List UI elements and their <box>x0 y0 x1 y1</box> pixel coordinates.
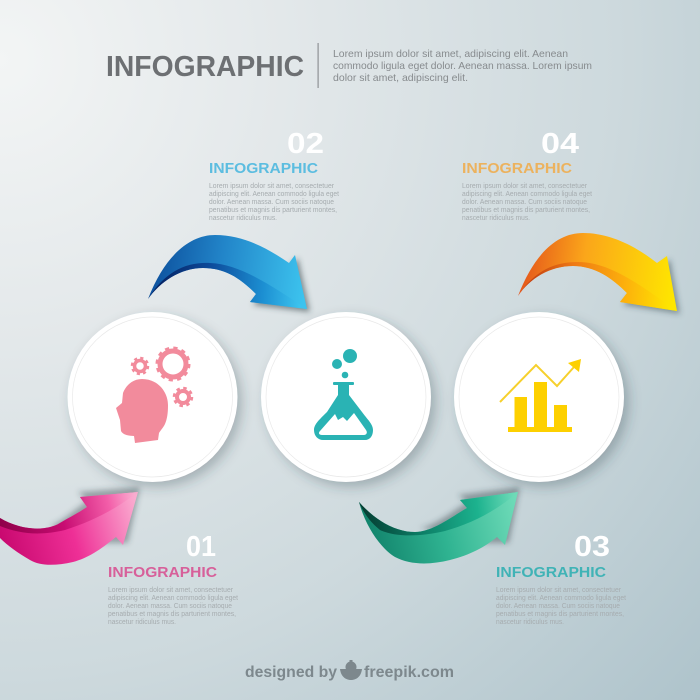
body 04 <box>462 183 592 222</box>
title: INFOGRAPHIC <box>106 51 304 83</box>
arrow: blue <box>148 235 310 312</box>
footer credit: freepik.com <box>364 664 454 681</box>
body 01: adipiscing elit. Aenean commodo ligula eget <box>108 595 238 602</box>
body 04: adipiscing elit. Aenean commodo ligula eget <box>462 191 592 198</box>
body 01: dolor. Aenean massa. Cum sociis natoque <box>108 603 232 610</box>
body 02: dolor. Aenean massa. Cum sociis natoque <box>209 199 334 206</box>
body 03: nascetur ridiculus mus. <box>496 619 564 626</box>
body 03: adipiscing elit. Aenean commodo ligula eget <box>496 595 626 602</box>
body 02: nascetur ridiculus mus. <box>209 215 277 222</box>
body 01: Lorem ipsum dolor sit amet, consectetuer <box>108 587 234 594</box>
icon: bar chart with rising arrow <box>500 359 581 432</box>
circle panel 2 <box>261 312 436 487</box>
body 01: nascetur ridiculus mus. <box>108 619 176 626</box>
step 01 text <box>108 531 238 626</box>
heading 04: INFOGRAPHIC <box>462 161 573 177</box>
body 04: nascetur ridiculus mus. <box>462 215 530 222</box>
step 04 text <box>462 128 592 222</box>
heading 01: INFOGRAPHIC <box>108 565 218 581</box>
body 04: penatibus et magnis dis parturient montes, <box>462 207 590 214</box>
step 02 text <box>209 128 339 222</box>
body 03: dolor. Aenean massa. Cum sociis natoque <box>496 603 620 610</box>
footer credit <box>245 660 454 681</box>
circle panel 1 <box>68 312 242 487</box>
body 01 <box>108 587 238 626</box>
body 03: penatibus et magnis dis parturient montes, <box>496 611 624 618</box>
body 04: dolor. Aenean massa. Cum sociis natoque <box>462 199 587 206</box>
body 02: adipiscing elit. Aenean commodo ligula eget <box>209 191 339 198</box>
body 02 <box>209 183 339 222</box>
arrow: pink <box>0 487 140 565</box>
body 04: Lorem ipsum dolor sit amet, consectetuer <box>462 183 588 190</box>
body 01: penatibus et magnis dis parturient montes, <box>108 611 236 618</box>
arrow: orange <box>518 233 680 314</box>
icon: flask with bubbles <box>314 349 373 440</box>
number 01: 01 <box>186 531 216 563</box>
intro paragraph: Lorem ipsum dolor sit amet, adipiscing elit. Aenean <box>333 48 568 60</box>
circle panel 3 <box>454 312 629 487</box>
footer credit: designed by <box>245 664 337 681</box>
heading 03: INFOGRAPHIC <box>496 565 607 581</box>
arrow: green <box>359 487 520 563</box>
icon: freepik logo <box>340 660 362 680</box>
heading 02: INFOGRAPHIC <box>209 161 319 177</box>
body 03: Lorem ipsum dolor sit amet, consectetuer <box>496 587 622 594</box>
number 03: 03 <box>574 531 610 563</box>
icon: head with gears <box>116 348 192 443</box>
number 04: 04 <box>541 128 579 160</box>
header <box>106 48 592 84</box>
number 02: 02 <box>287 128 324 160</box>
body 02: Lorem ipsum dolor sit amet, consectetuer <box>209 183 335 190</box>
body 02: penatibus et magnis dis parturient montes, <box>209 207 337 214</box>
intro paragraph: commodo ligula eget dolor. Aenean massa. Lorem ipsum <box>333 60 592 72</box>
step 03 text <box>496 531 626 626</box>
intro paragraph: dolor sit amet, adipiscing elit. <box>333 72 468 84</box>
body 03 <box>496 587 626 626</box>
intro paragraph <box>333 48 592 84</box>
